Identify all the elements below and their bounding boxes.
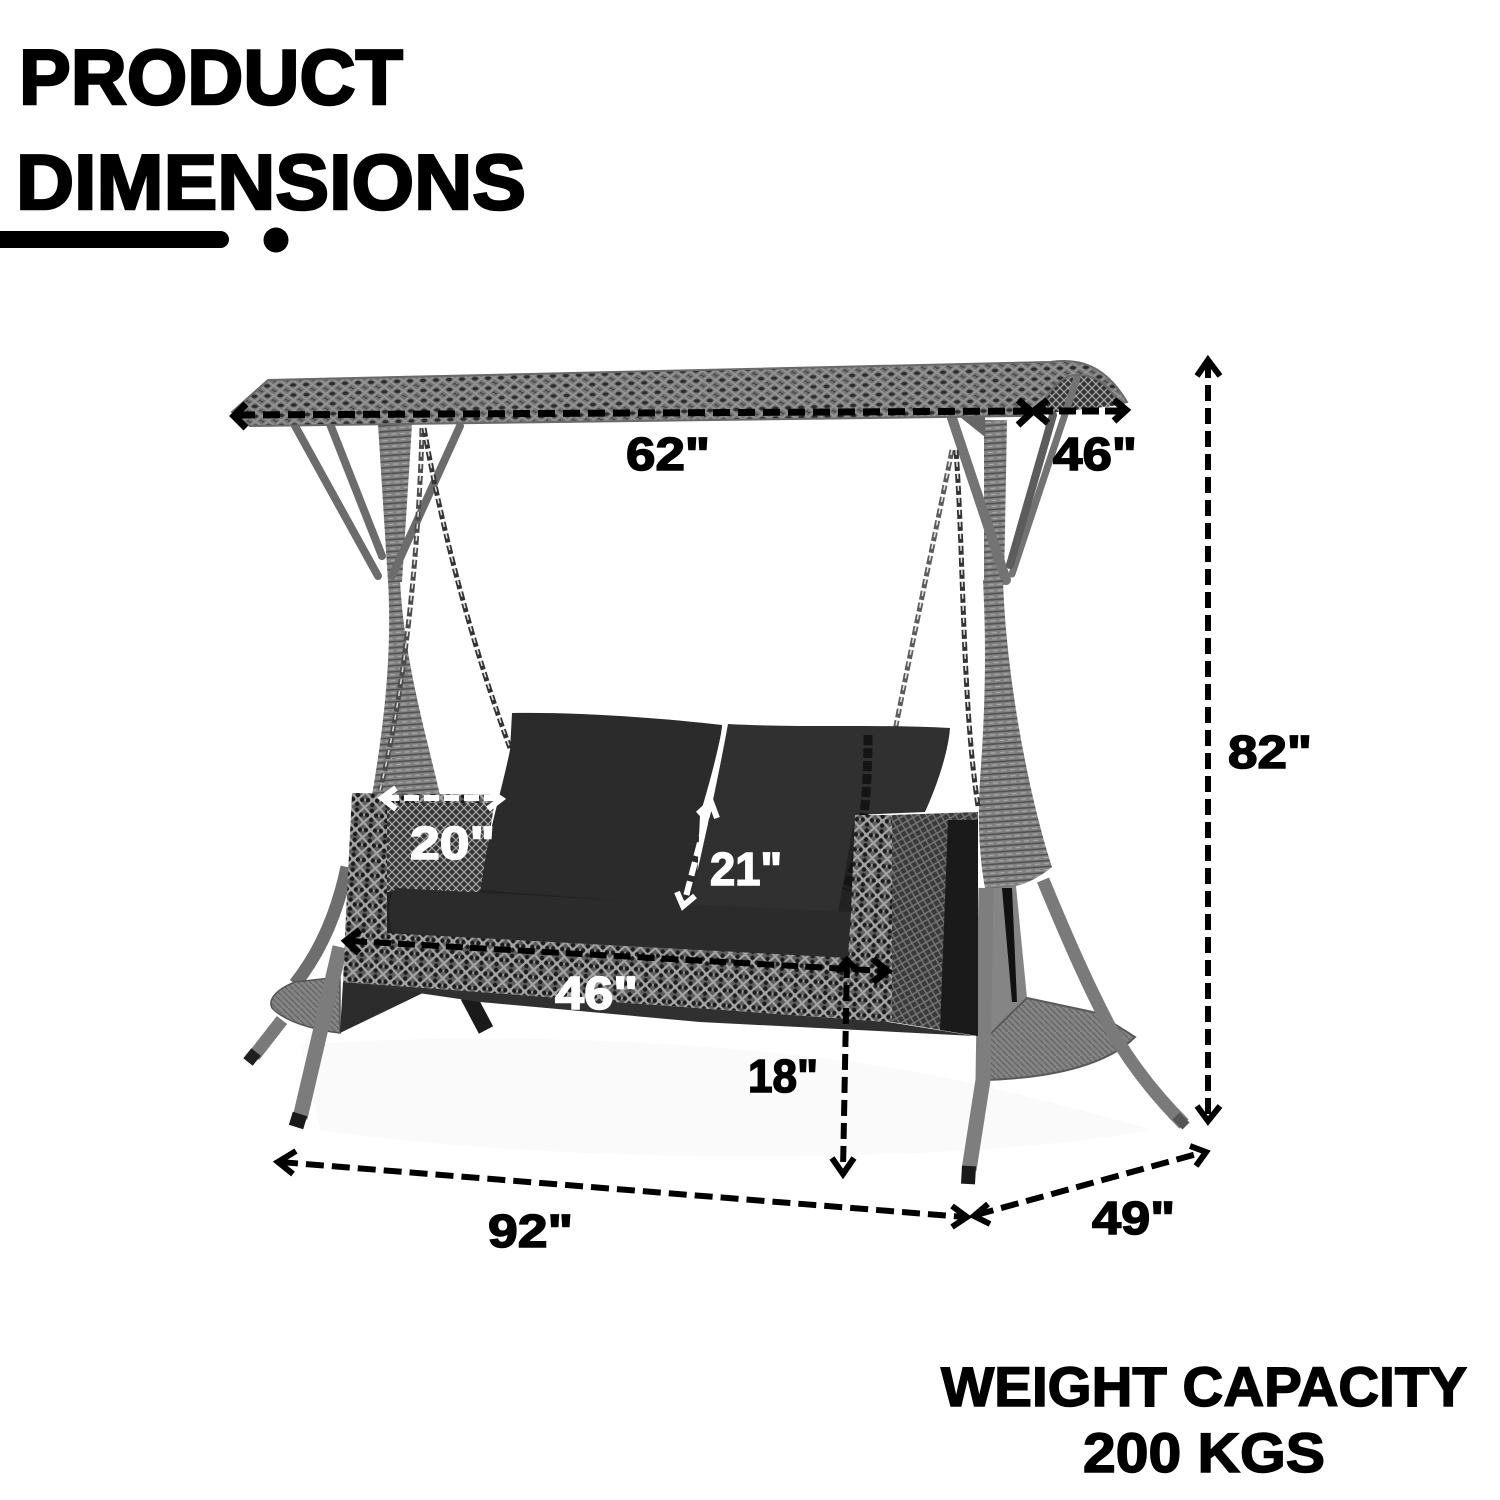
title: product dimensions: DIMENSIONS xyxy=(16,138,526,226)
right shelf xyxy=(983,998,1135,1080)
dimension: seat width 46 xyxy=(346,930,887,1019)
canopy underside xyxy=(1040,375,1122,414)
dimension: overall depth 49: 49" xyxy=(1092,1192,1175,1244)
dimension: back height 21: 21" xyxy=(710,843,782,895)
dimension: height 82: 82" xyxy=(1228,726,1312,778)
dimension: canopy depth 46: 46" xyxy=(1053,428,1137,480)
weight capacity note: WEIGHT CAPACITY xyxy=(941,1355,1467,1418)
title: product dimensions: PRODUCT xyxy=(19,33,403,121)
right legs xyxy=(968,880,1186,1184)
seat cushion xyxy=(389,888,850,958)
cushion: back right xyxy=(690,724,950,912)
dimension: canopy depth 46 xyxy=(1034,400,1137,480)
dimension: arm depth 20 xyxy=(382,788,501,869)
left post upper xyxy=(378,424,412,582)
left front leg xyxy=(296,947,340,1127)
dimension: seat width 46: 46" xyxy=(555,967,638,1019)
dimension: seat height 18: 18" xyxy=(748,1050,818,1102)
weight capacity note: 200 KGS xyxy=(1083,1421,1325,1484)
dimension: overall length 92 xyxy=(278,1151,967,1257)
seat frame right arm xyxy=(848,815,892,1022)
seat frame left arm xyxy=(345,793,500,935)
dimension: back height 21 xyxy=(677,802,782,906)
title: product dimensions xyxy=(16,33,526,226)
under-rail shadow xyxy=(343,982,975,1036)
product photo: wicker swing xyxy=(232,361,1186,1184)
chain behind on cushion xyxy=(846,735,868,890)
dimension: overall depth 49 xyxy=(974,1146,1206,1244)
right post upper xyxy=(984,420,1007,585)
centre rear leg xyxy=(468,996,486,1030)
under seat skirt xyxy=(340,982,425,1033)
left canopy struts xyxy=(294,424,460,576)
right canopy struts xyxy=(952,378,1077,580)
dimension: canopy width 62 xyxy=(234,400,1032,480)
chains xyxy=(380,428,978,810)
left arc leg xyxy=(295,867,347,984)
floor shadow xyxy=(300,1039,1150,1156)
seat front rail xyxy=(343,933,888,1022)
left shelf xyxy=(271,977,340,1033)
rear right panel xyxy=(985,886,1027,1037)
dimension: canopy width 62: 62" xyxy=(626,428,710,480)
cushion: back left xyxy=(480,713,722,906)
dimension: height 82 xyxy=(1197,360,1312,1121)
dimension: arm depth 20: 20" xyxy=(410,817,495,869)
heading underline with dot xyxy=(0,228,288,252)
left post flare xyxy=(372,580,440,795)
dimension: overall length 92: 92" xyxy=(488,1205,573,1257)
left rear leg xyxy=(248,1020,282,1062)
weight capacity note xyxy=(941,1355,1467,1484)
canopy xyxy=(232,361,1127,426)
side panel right xyxy=(892,812,978,1036)
dimension: seat height 18 xyxy=(748,960,859,1174)
right post flare xyxy=(979,580,1052,888)
cushion underlay xyxy=(385,812,856,960)
